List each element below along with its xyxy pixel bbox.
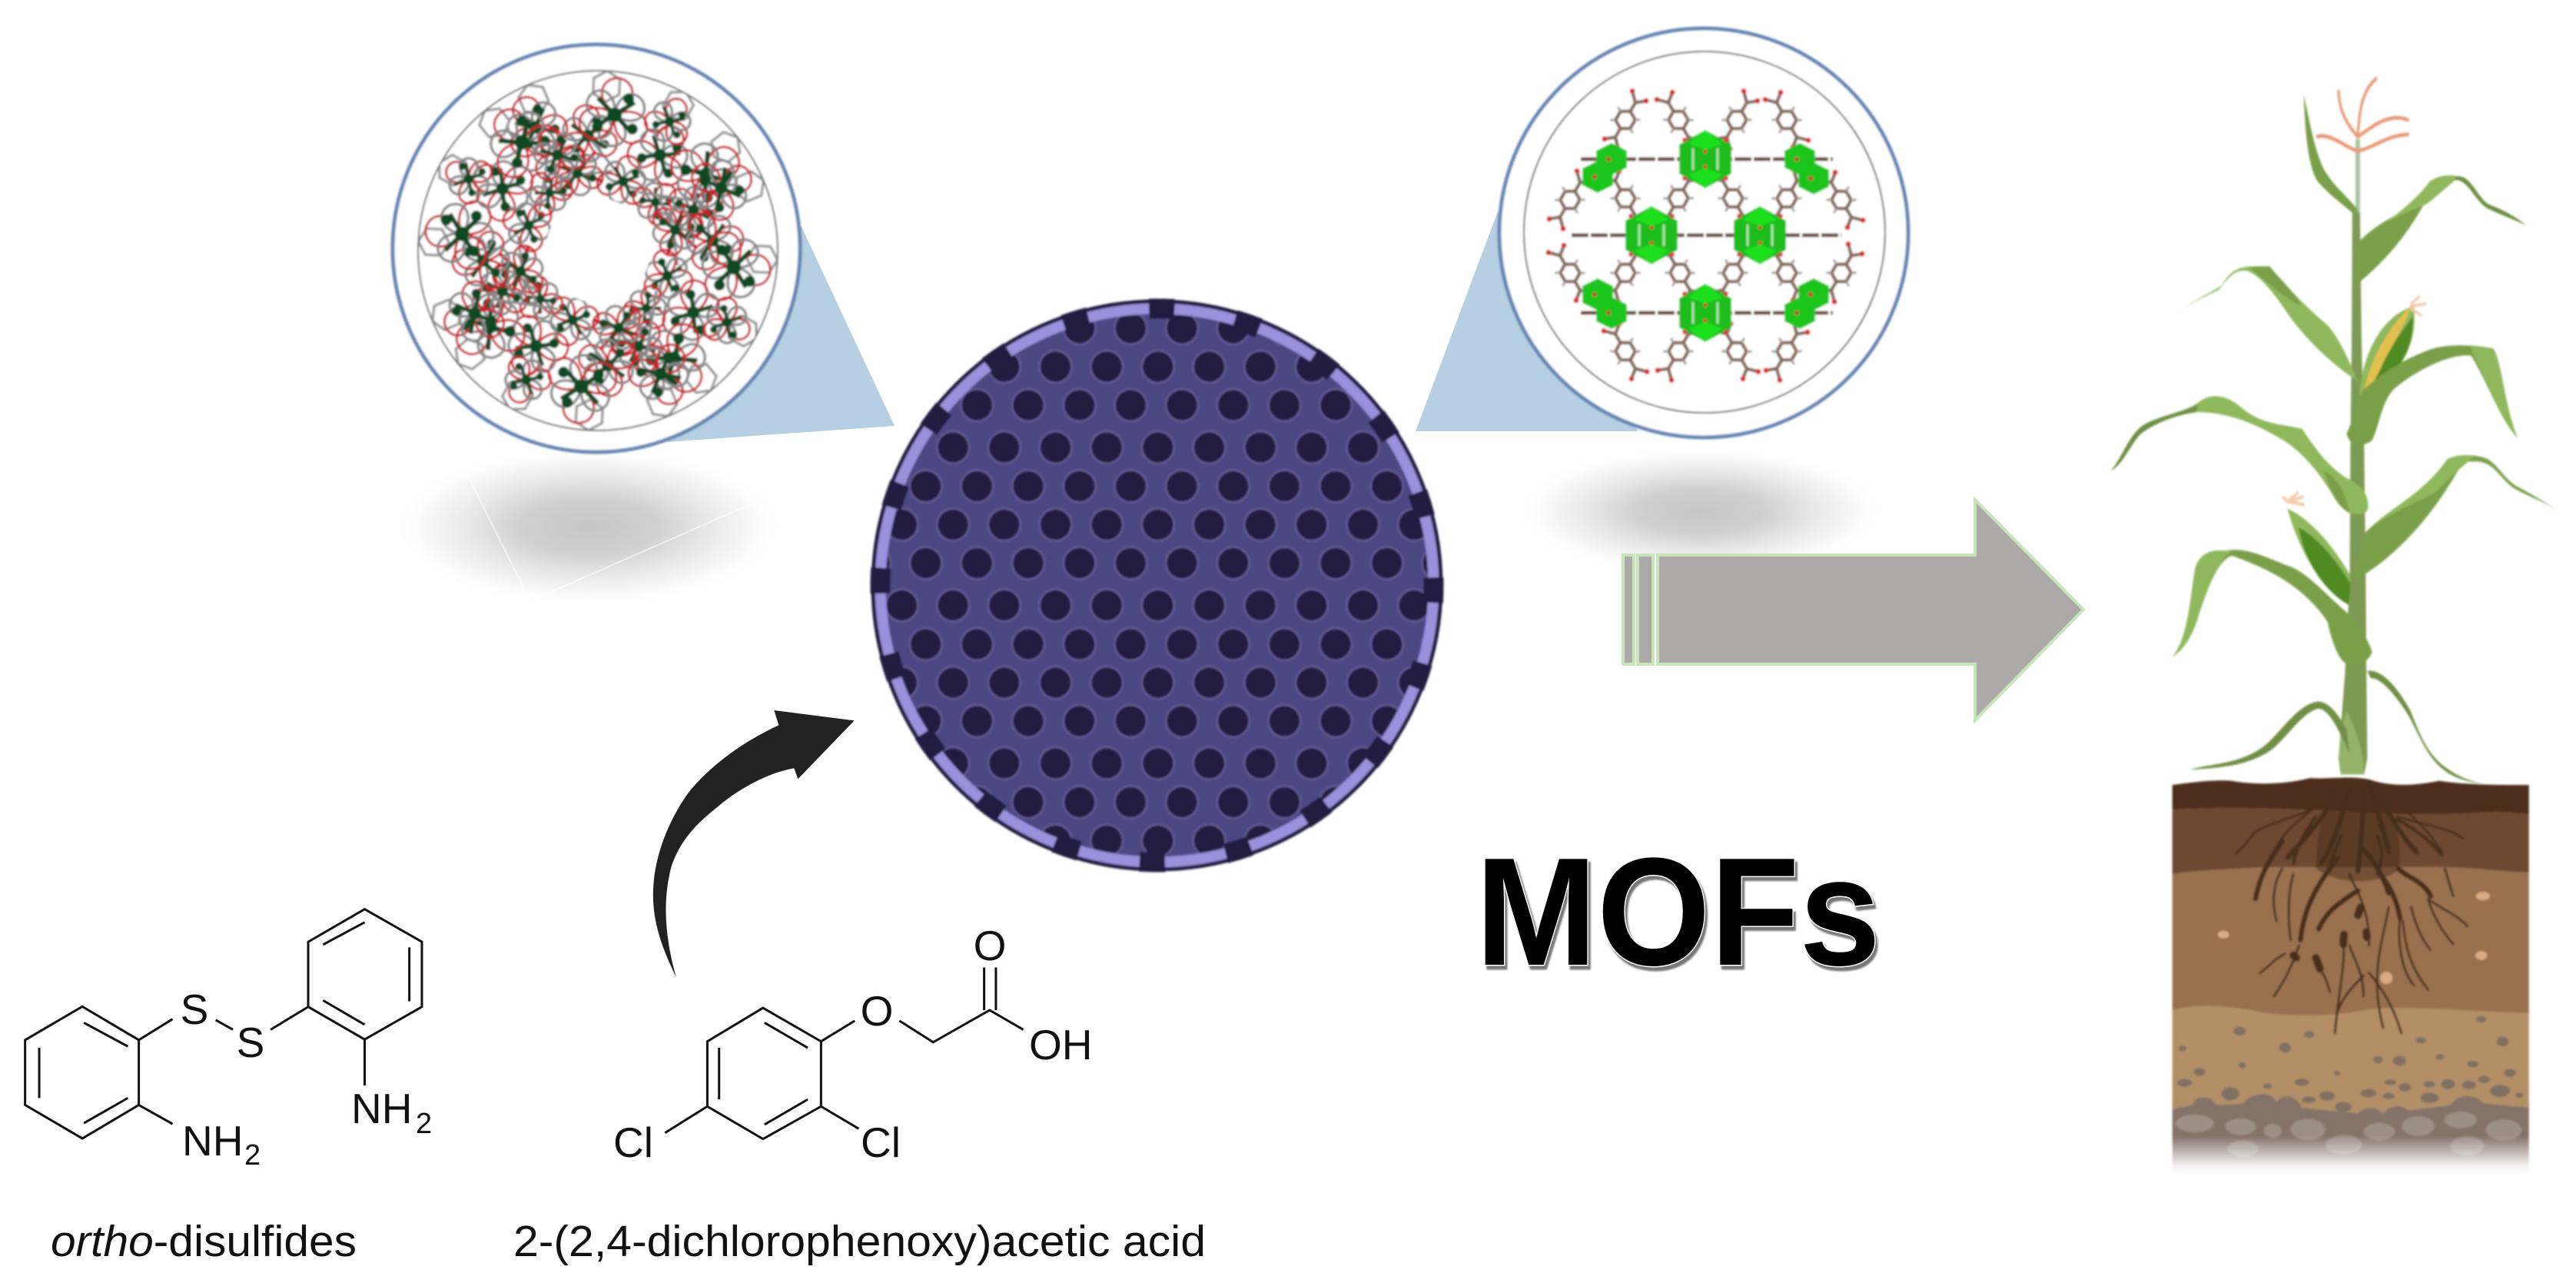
- plant: upper right leaf: [2356, 175, 2526, 285]
- plant: top leaf: [2304, 95, 2358, 216]
- shadow under left bubble: [393, 447, 785, 607]
- left magnified bubble: MOF framework network: [389, 42, 803, 455]
- molecule: ortho-disulfide structure: [25, 909, 432, 1172]
- corn plant: [2111, 78, 2558, 784]
- shadow under right bubble: [1516, 447, 1885, 576]
- zoom wedge: right bubble to disc: [1416, 211, 1638, 431]
- plant: long left leaf: [2111, 396, 2368, 514]
- soil: mid-dark layer: [2173, 808, 2529, 874]
- central MOF disc with pores and dashed rim: [873, 301, 1442, 870]
- soil: subsoil layer: [2173, 867, 2529, 1015]
- plant: lower left leaf: [2173, 550, 2372, 665]
- molecule: 2,4-D structure: O: [974, 922, 1006, 969]
- label: ortho-disulfides: ortho-disulfides: [51, 1217, 357, 1266]
- plant: lower right leaf: [2353, 455, 2558, 582]
- faint reflection lines under left bubble: [467, 474, 773, 601]
- molecule: 2,4-D structure: Cl: [613, 1118, 653, 1166]
- label: 2-(2,4-dichlorophenoxy)acetic acid: 2-(2,4-dichlorophenoxy)acetic acid: [513, 1217, 1206, 1266]
- plant: bottom left leaf: [2190, 702, 2350, 769]
- soil: sandy layer with pebbles: [2173, 1006, 2529, 1113]
- molecule: 2,4-D structure: OH: [1029, 1021, 1093, 1069]
- soil: fade at bottom: [2167, 1136, 2535, 1176]
- right magnified bubble: MOF crystal with green nodes: [1499, 28, 1908, 437]
- plant: lower ear: [2282, 492, 2350, 605]
- title: MOFs: MOFs: [1476, 826, 1881, 998]
- molecule: ortho-disulfide structure: NH: [182, 1117, 243, 1165]
- molecule: ortho-disulfide structure: 2: [244, 1139, 261, 1172]
- plant: bottom right leaf: [2367, 671, 2484, 784]
- molecule: 2,4-D structure: [613, 922, 1093, 1166]
- soil profile with roots: [2167, 777, 2535, 1176]
- molecule: ortho-disulfide structure: NH: [351, 1085, 412, 1132]
- molecule: ortho-disulfide structure: S: [181, 986, 208, 1033]
- plant: upper ear: [2359, 296, 2426, 396]
- molecule: ortho-disulfide structure: S: [237, 1019, 264, 1066]
- soil: topsoil: [2173, 777, 2529, 814]
- arrow: molecules into MOF: [653, 710, 855, 978]
- roots: [2236, 783, 2467, 1033]
- arrow: MOF toward plant: [1623, 500, 2083, 720]
- molecule: 2,4-D structure: Cl: [861, 1118, 901, 1166]
- plant: base sheath: [2339, 711, 2364, 775]
- molecule: ortho-disulfide structure: 2: [416, 1108, 432, 1140]
- zoom wedge: left bubble to disc: [667, 225, 895, 442]
- plant: right mid leaf: [2346, 345, 2518, 445]
- plant: tassel: [2316, 78, 2409, 214]
- plant: upper left leaf: [2176, 266, 2358, 381]
- soil: bottom stone layer: [2173, 1094, 2529, 1176]
- molecule: 2,4-D structure: O: [861, 987, 893, 1035]
- plant: stem: [2339, 212, 2367, 775]
